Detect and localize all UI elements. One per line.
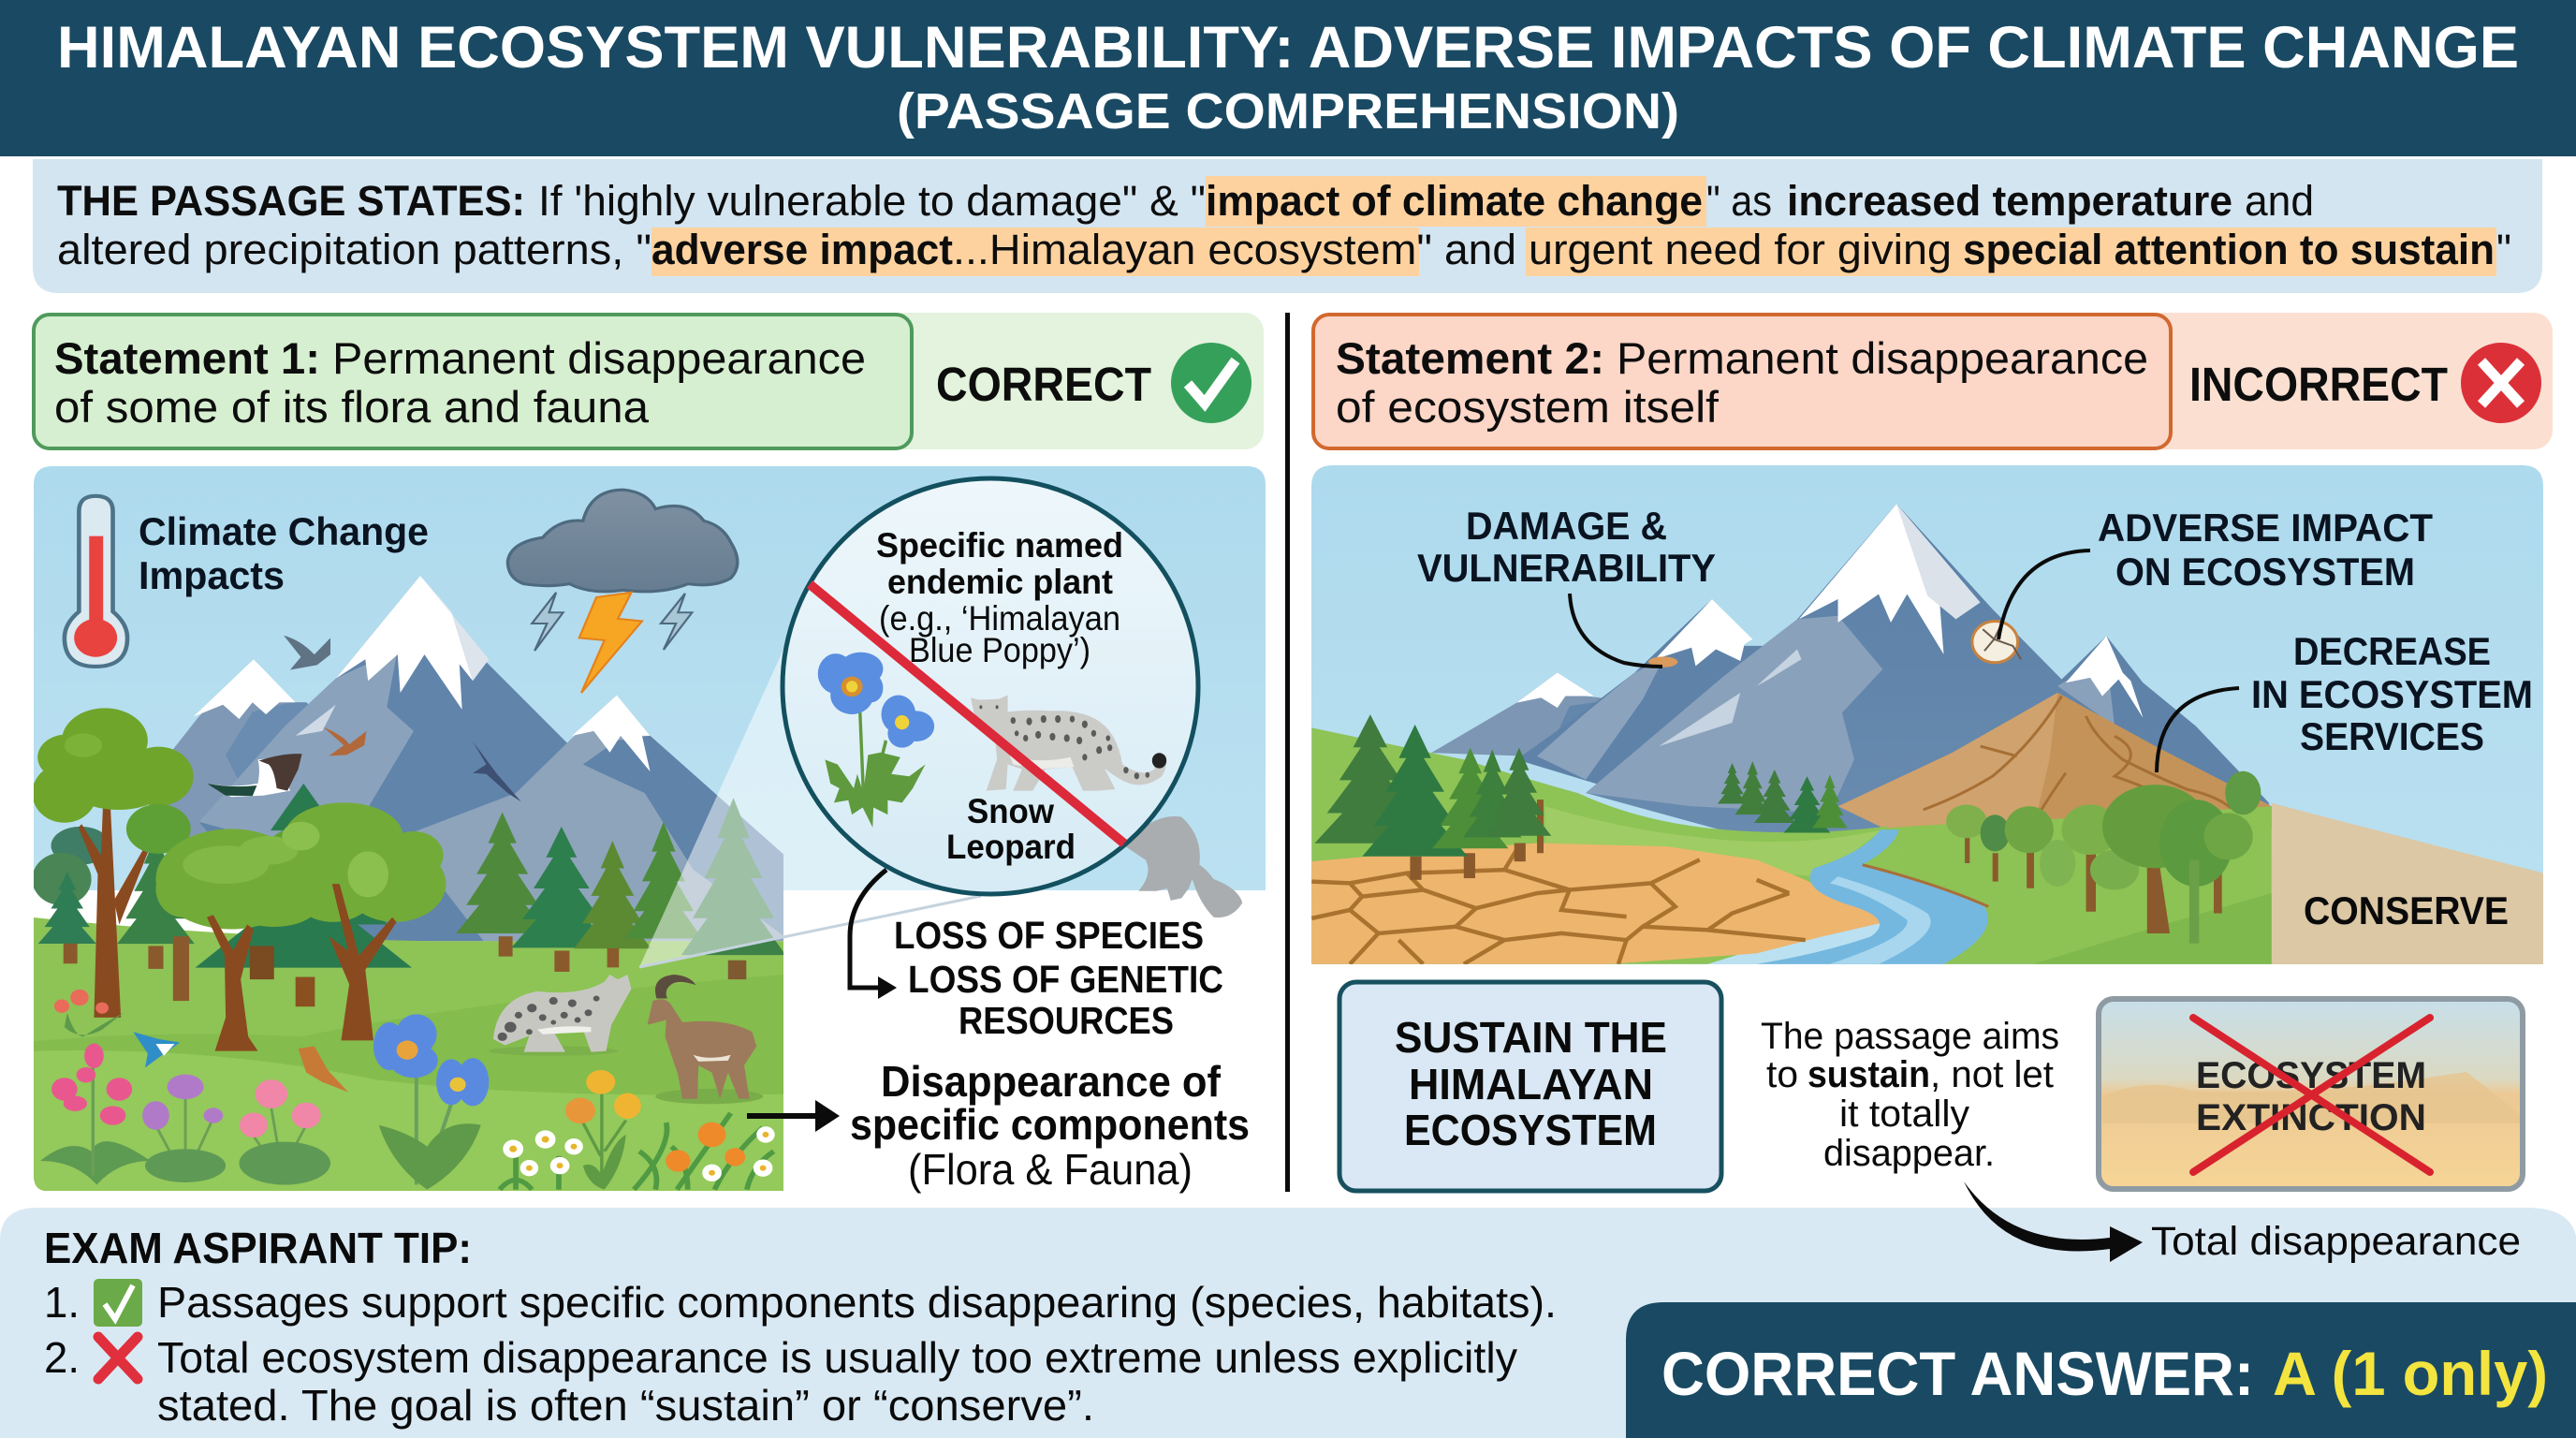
circle text: Specific named: [876, 526, 1123, 565]
ibex: [648, 975, 763, 1104]
passage text: adverse impact: [651, 226, 953, 273]
mountains: [1431, 504, 2269, 859]
broadleaf trees right: [1946, 771, 2261, 944]
arrow: decrease leader: [2157, 688, 2239, 772]
conifers: [456, 798, 785, 979]
passage text: ...Himalayan ecosystem": [953, 226, 1432, 273]
passage text: THE PASSAGE STATES:: [57, 177, 525, 225]
arrow: to total disappearance: [1964, 1181, 2143, 1262]
tip heading: EXAM ASPIRANT TIP:: [44, 1224, 472, 1272]
text: loss of species: LOSS OF GENETIC: [908, 958, 1223, 1001]
statement 1 box: of some of its flora and fauna: [54, 382, 650, 432]
mountains: [161, 576, 784, 941]
label: climate change impacts: [139, 509, 429, 597]
label: adverse impact: ADVERSE IMPACT: [2098, 506, 2433, 550]
cracked earth: [1311, 844, 1887, 964]
title: HIMALAYAN ECOSYSTEM VULNERABILITY: ADVERSE IMPACTS OF CLIMATE CHANGE: [57, 15, 2519, 81]
conifers left: [1314, 714, 1551, 880]
text: loss of species: [894, 914, 1223, 1042]
scar marks: [1648, 622, 2021, 668]
highlights: [651, 176, 2496, 276]
passage text: special attention to sustain: [1963, 226, 2495, 273]
icon: snow leopard: [971, 696, 1166, 791]
circle: specific species: [783, 478, 1198, 894]
icon: thermometer: [65, 496, 127, 667]
circle text: Blue Poppy’): [909, 631, 1090, 669]
passage text: ": [2496, 226, 2511, 273]
label: climate change impacts: Impacts: [139, 553, 285, 597]
panel: statement 2: [1312, 313, 2553, 449]
arrow: to disappearance: [747, 1100, 840, 1132]
box: ecosystem extinction: EXTINCTION: [2196, 1097, 2426, 1138]
green hills: [1311, 727, 2272, 964]
statement 2 box: [1313, 315, 2171, 448]
back trees left: [32, 784, 412, 1006]
text: disappearance of components: specific components: [850, 1100, 1250, 1149]
middle trees: [126, 802, 446, 1051]
circle text: [876, 526, 1123, 866]
panel: left sky: [34, 466, 1266, 890]
birds: [133, 636, 521, 1093]
label: climate change impacts: Climate Change: [139, 509, 429, 553]
text: disappearance of components: [850, 1057, 1250, 1194]
icon: blue poppy: [818, 653, 934, 828]
text: passage aims: [1761, 1016, 2059, 1174]
statement 1 box: Permanent disappearance: [332, 333, 866, 383]
text: loss of species: LOSS OF SPECIES: [894, 914, 1204, 957]
text: passage aims: The passage aims: [1761, 1016, 2059, 1057]
icon: check: [1171, 343, 1251, 423]
box: sustain: SUSTAIN THE: [1395, 1013, 1667, 1062]
illustration: flora and fauna landscape: [32, 576, 785, 1209]
illustration: ecosystem degradation landscape: [1301, 459, 2554, 967]
arrow: adverse impact leader: [1998, 550, 2090, 639]
box: sustain: [1339, 982, 1721, 1191]
passage text: and: [2245, 177, 2314, 225]
statement 2 box: Permanent disappearance: [1617, 333, 2148, 383]
answer box: [1626, 1302, 2576, 1438]
passage text: " as: [1706, 177, 1772, 225]
text: disappearance of components: Disappearance of: [881, 1057, 1222, 1106]
icon: storm cloud: [507, 490, 738, 693]
text: passage aims: to: [1766, 1054, 1798, 1095]
label: damage and vulnerability: VULNERABILITY: [1417, 546, 1716, 590]
answer box: CORRECT ANSWER:: [1661, 1339, 2254, 1408]
box: ecosystem extinction: ECOSYSTEM: [2196, 1055, 2426, 1096]
text: loss of species: RESOURCES: [959, 999, 1174, 1042]
passage text: If 'highly vulnerable to damage" & ": [538, 177, 1206, 225]
passage text: impact of climate change: [1206, 177, 1703, 225]
text: passage aims: it totally: [1839, 1093, 1969, 1135]
text: passage aims: , not let: [1930, 1054, 2054, 1095]
tip item 1: 1.: [44, 1278, 80, 1327]
tip item 2: 2.: [44, 1333, 80, 1382]
ground: [32, 917, 784, 1209]
passage text: altered precipitation patterns, ": [57, 226, 651, 273]
passage text: and: [1444, 226, 1516, 273]
subtitle: (PASSAGE COMPREHENSION): [897, 83, 1679, 139]
statement 2 box: Statement 2:: [1336, 333, 1604, 383]
icon: cross: [2461, 343, 2541, 423]
zoom cone overlay: [639, 583, 981, 967]
label: decrease in ecosystem services: SERVICES: [2300, 714, 2484, 758]
label: adverse impact: ON ECOSYSTEM: [2115, 550, 2415, 594]
text: disappearance of components: (Flora & Fauna): [908, 1145, 1193, 1194]
tip item 2: Total ecosystem disappearance is usually too extreme unless explicitly: [157, 1333, 1517, 1382]
passage text: increased temperature: [1787, 177, 2232, 225]
red strike line: [810, 584, 1124, 844]
field leopard: [489, 975, 631, 1056]
incorrect label: INCORRECT: [2189, 358, 2448, 411]
arrow: circle to loss of species: [850, 870, 897, 999]
passage text: [57, 177, 2511, 273]
correct label: CORRECT: [936, 358, 1151, 411]
panel: passage states: [33, 159, 2542, 293]
statement 1 box: Statement 1:: [54, 333, 320, 383]
tip item 1: Passages support specific components disappearing (species, habitats).: [157, 1278, 1557, 1327]
text: passage aims: disappear.: [1823, 1133, 1995, 1174]
label: decrease in ecosystem services: DECREASE: [2293, 629, 2491, 673]
label: conserve: CONSERVE: [2304, 888, 2509, 932]
wildflowers: [40, 990, 775, 1190]
arrow: damage leader: [1570, 594, 1662, 667]
sand: [2272, 803, 2544, 967]
label: decrease in ecosystem services: [2251, 629, 2533, 758]
tip item 2: [44, 1333, 1517, 1430]
tip item 2: stated. The goal is often “sustain” or “conserve”.: [157, 1381, 1094, 1430]
brown hill: [1838, 693, 2272, 829]
circle text: (e.g., ‘Himalayan: [879, 599, 1120, 638]
box: sustain: ECOSYSTEM: [1404, 1106, 1657, 1154]
text: total disappearance: Total disappearance: [2151, 1219, 2521, 1264]
answer box: A (1 only): [2273, 1339, 2548, 1408]
sky: [1301, 459, 2554, 967]
box: ecosystem extinction: [2099, 999, 2523, 1189]
label: decrease in ecosystem services: IN ECOSYSTEM: [2251, 672, 2533, 716]
text: passage aims: sustain: [1808, 1054, 1930, 1095]
divider: [1285, 313, 1290, 1192]
left tree: [32, 708, 194, 1018]
box: sustain: HIMALAYAN: [1409, 1060, 1653, 1108]
ghost leopard silhouette: [1124, 816, 1242, 917]
circle text: Snow: [967, 792, 1054, 830]
label: damage and vulnerability: DAMAGE &: [1466, 504, 1667, 548]
label: damage and vulnerability: [1417, 504, 1716, 590]
panel: exam tip: [0, 1208, 2576, 1438]
passage text: urgent need for giving: [1529, 226, 1952, 273]
river: [1757, 829, 1988, 964]
label: adverse impact: [2098, 506, 2433, 594]
circle text: Leopard: [946, 828, 1076, 866]
statement 2 box: of ecosystem itself: [1336, 382, 1720, 432]
panel: statement 1: [33, 313, 1264, 449]
red cross: [2193, 1018, 2430, 1172]
circle text: endemic plant: [887, 563, 1113, 601]
conifers middle: [1718, 761, 1848, 833]
statement 1 box: [34, 315, 912, 448]
header band: [0, 0, 2576, 156]
